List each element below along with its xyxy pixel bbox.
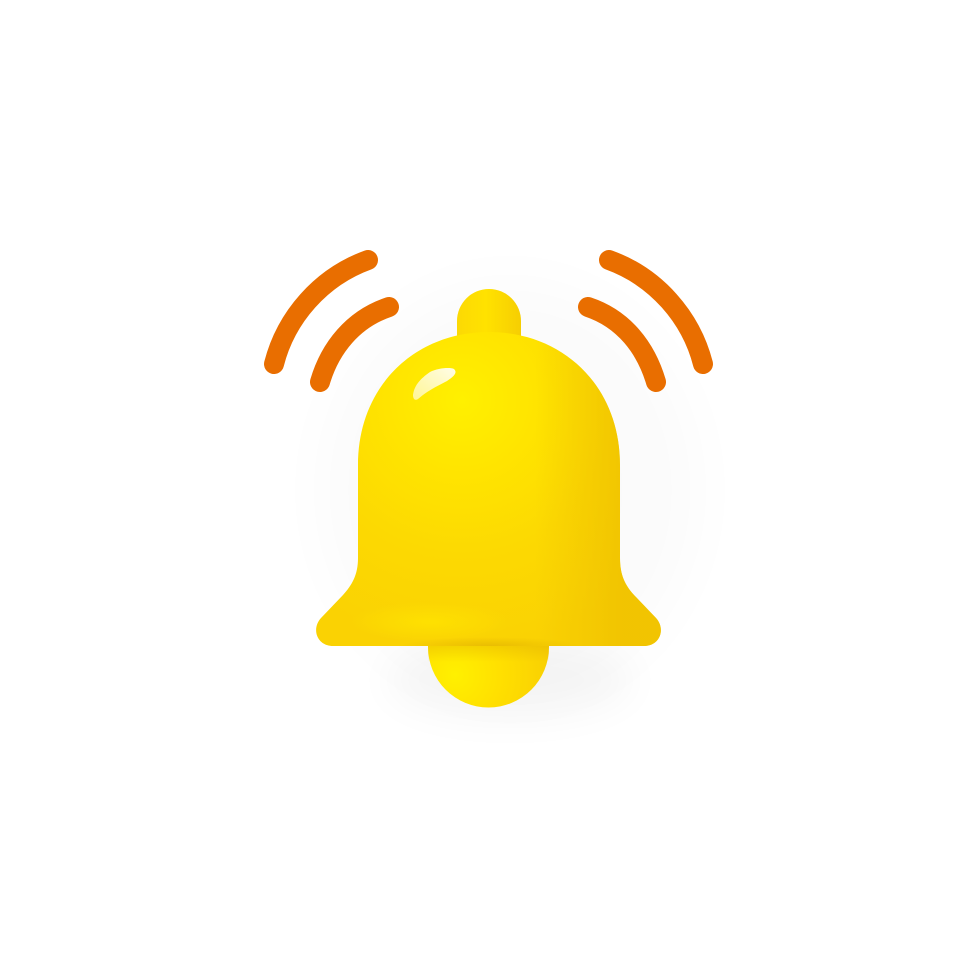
icon: bell body — [316, 332, 661, 646]
icon: bell top knob — [457, 289, 521, 345]
soft drop shadow — [320, 280, 700, 720]
icon: right sound waves — [588, 260, 703, 382]
icon: bell clapper — [428, 630, 549, 708]
icon: left sound waves — [274, 260, 389, 382]
icon: highlight on bell — [413, 368, 456, 400]
